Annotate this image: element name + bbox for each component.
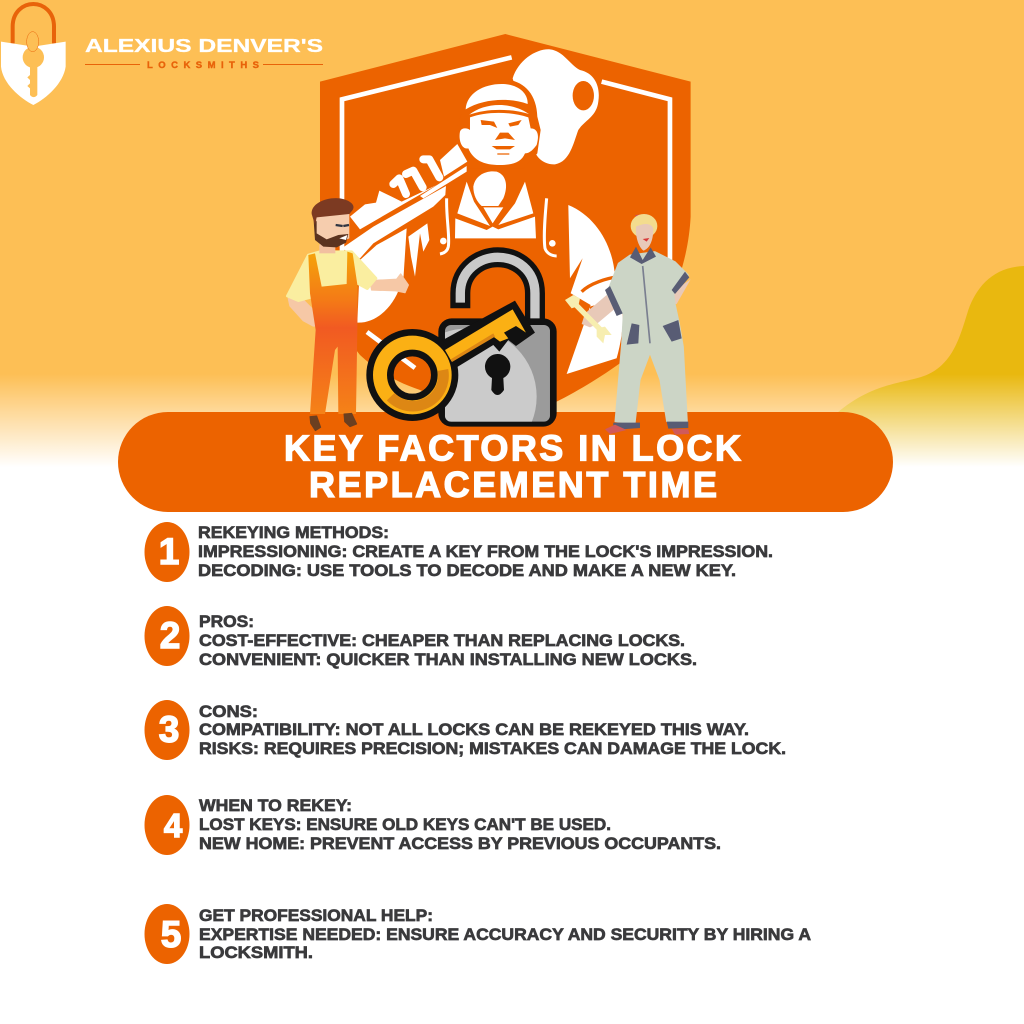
- locksmith upper body: [342, 79, 557, 280]
- title banner: [118, 412, 893, 512]
- hill shape: [820, 266, 1024, 480]
- item 3: cons: [144, 700, 786, 760]
- item 5: get professional help: LOCKSMITH.: [199, 943, 313, 962]
- locksmith arms: [357, 205, 623, 374]
- item 2: pros: COST-EFFECTIVE: CHEAPER THAN REPLACING LOCKS.: [199, 631, 685, 650]
- number badge 3: 3: [159, 709, 179, 750]
- wrench: [573, 302, 603, 333]
- woman collar, zip, cuffs and pockets: [605, 247, 689, 430]
- item 1: rekeying methods: REKEYING METHODS:: [198, 523, 389, 542]
- item 4: when to rekey: NEW HOME: PREVENT ACCESS BY PREVIOUS OCCUPANTS.: [199, 834, 721, 853]
- woman head: [631, 214, 657, 251]
- golden key: [380, 301, 535, 407]
- number badge 4: 4: [164, 807, 183, 844]
- woman in grey coverall: [565, 214, 691, 435]
- shield emblem with locksmith: [320, 34, 691, 430]
- logo wordmark: ALEXIUS DENVER'S: [85, 36, 323, 56]
- man in orange overalls: [287, 198, 408, 431]
- number badge 2: 2: [160, 615, 180, 656]
- item 3: cons: COMPATIBILITY: NOT ALL LOCKS CAN BE REKEYED THIS WAY.: [199, 720, 749, 739]
- item 3: cons: RISKS: REQUIRES PRECISION; MISTAKES CAN DAMAGE THE LOCK.: [199, 739, 786, 758]
- title: KEY FACTORS IN LOCK: [284, 428, 741, 468]
- item 1: rekeying methods: IMPRESSIONING: CREATE A KEY FROM THE LOCK'S IMPRESSION.: [198, 542, 773, 561]
- man overalls: [308, 252, 358, 414]
- item 4: when to rekey: WHEN TO REKEY:: [199, 796, 352, 815]
- item 4: when to rekey: [144, 795, 721, 855]
- shield and frame: [320, 34, 691, 430]
- title: [284, 428, 741, 505]
- logo subtitle: LOCKSMITHS: [147, 60, 259, 71]
- woman arm and hand: [582, 279, 691, 327]
- locksmith collar and shirt: [455, 182, 536, 238]
- number badge 3: [144, 700, 190, 760]
- padlock shackle: [460, 257, 535, 330]
- man boots: [310, 413, 357, 431]
- overall straps: [440, 198, 557, 256]
- number badge 5: 5: [161, 914, 181, 955]
- number badge 4: [144, 795, 190, 855]
- number badge 2: [144, 606, 190, 666]
- hand gripping key blade: [342, 144, 467, 280]
- item 5: get professional help: [144, 904, 811, 964]
- item 1: rekeying methods: DECODING: USE TOOLS TO DECODE AND MAKE A NEW KEY.: [198, 561, 736, 580]
- padlock and key: [380, 257, 557, 465]
- item 5: get professional help: GET PROFESSIONAL HELP:: [199, 906, 433, 925]
- number badge 1: [144, 522, 190, 582]
- man shirt: [287, 252, 376, 301]
- item 2: pros: CONVENIENT: QUICKER THAN INSTALLING NEW LOCKS.: [199, 650, 697, 669]
- item 4: when to rekey: LOST KEYS: ENSURE OLD KEYS CAN'T BE USED.: [199, 815, 611, 834]
- item 2: pros: PROS:: [199, 612, 254, 631]
- item 1: rekeying methods: [144, 522, 773, 582]
- man head: [312, 198, 354, 253]
- logo icon: padlock shield with key: [1, 4, 66, 105]
- woman coverall: [607, 252, 688, 424]
- man arms: [288, 274, 408, 326]
- item 3: cons: CONS:: [199, 702, 258, 721]
- locksmith head and cap: [456, 79, 541, 168]
- logo: [1, 4, 323, 105]
- number badge 1: 1: [159, 531, 179, 572]
- woman shoes: [605, 425, 689, 435]
- number badge 5: [144, 904, 190, 964]
- giant key head: [513, 49, 599, 164]
- item 2: pros: [144, 606, 697, 669]
- item 5: get professional help: EXPERTISE NEEDED: ENSURE ACCURACY AND SECURITY BY HIRING A: [199, 925, 811, 944]
- title: REPLACEMENT TIME: [309, 464, 717, 505]
- locksmith neck: [473, 171, 506, 206]
- padlock body: [438, 318, 557, 427]
